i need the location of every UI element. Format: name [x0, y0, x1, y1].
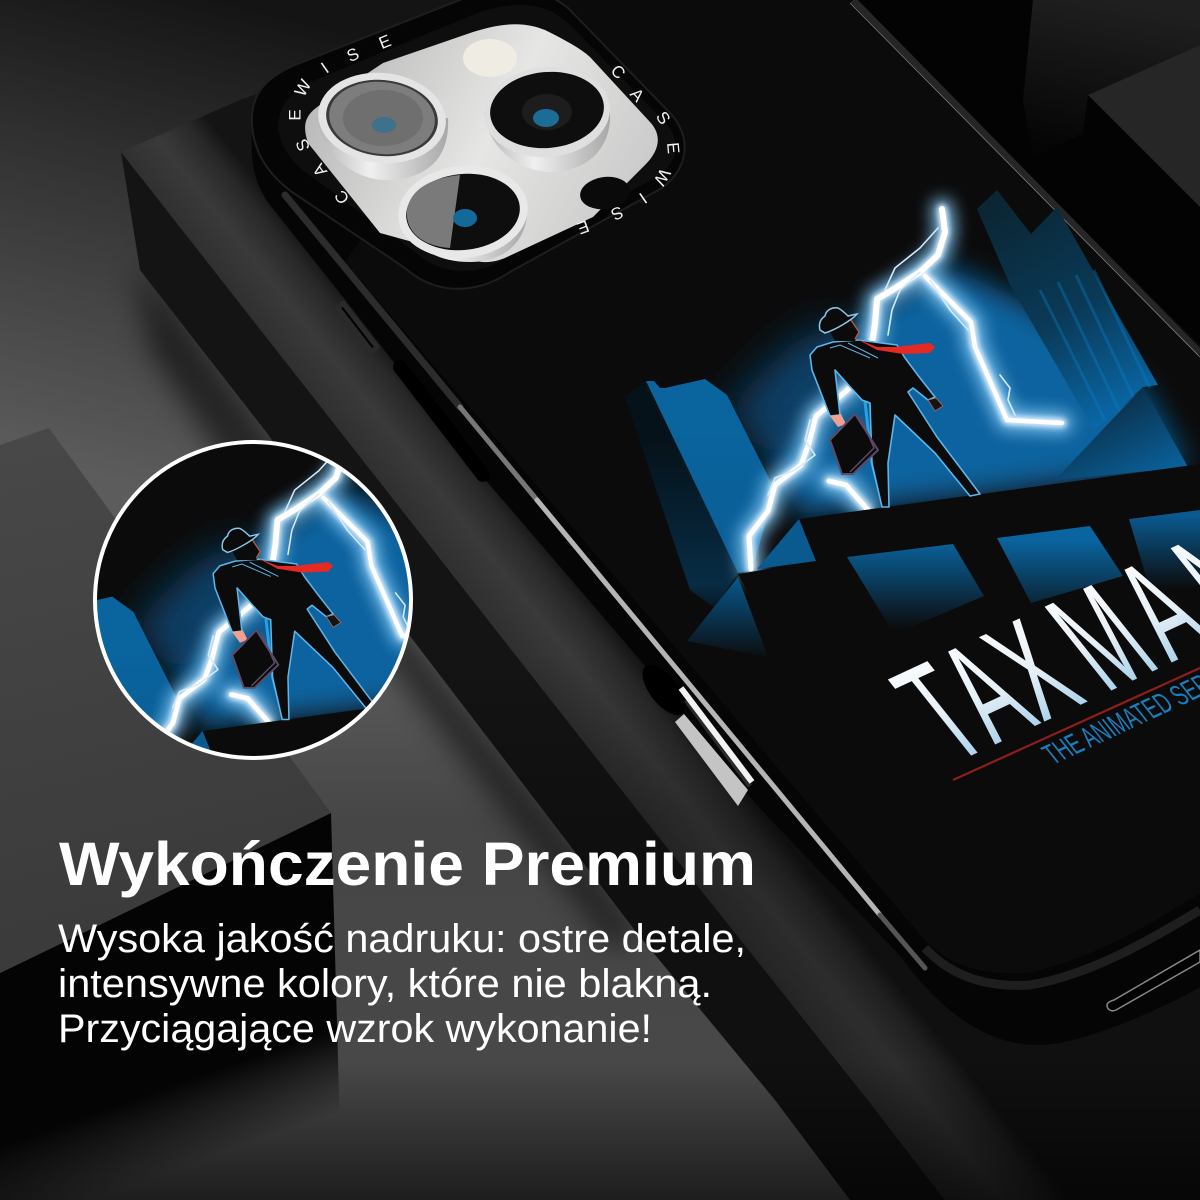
bottom rim: [925, 910, 1200, 985]
lens tele: [394, 159, 532, 265]
plinth side face: [121, 152, 945, 1200]
screen: [345, 0, 1200, 973]
logo underline: [953, 668, 1200, 780]
camera glass: [305, 24, 658, 262]
detail inset circle: [93, 440, 413, 760]
volume button: [400, 367, 483, 475]
top edge highlight: [853, 0, 1200, 353]
flash: [463, 39, 517, 77]
CASEWISE ring text: S: [292, 136, 314, 154]
artwork: taxman poster on phone: [625, 190, 1200, 770]
heading: Wykończenie Premium: [59, 830, 756, 898]
CASEWISE ring text: A: [309, 159, 331, 180]
small plinth top face: [0, 428, 331, 973]
CASEWISE ring text: A: [626, 84, 648, 106]
CASEWISE ring text: S: [652, 108, 674, 128]
body text: Wysoka jakość nadruku: ostre detale,: [58, 917, 746, 961]
camera bump outer: [252, 0, 685, 289]
silver button: [634, 658, 752, 806]
CASEWISE ring text: I: [318, 59, 332, 77]
far blocks: [853, 0, 1200, 353]
small plinth front face: [0, 813, 340, 1200]
CASEWISE ring text: E: [663, 142, 683, 154]
CASEWISE ring text: E: [376, 31, 394, 53]
soft shadow beside plinth: [135, 262, 637, 950]
CASEWISE ring text: W: [291, 76, 315, 100]
CASEWISE ring text: E: [286, 109, 304, 121]
body text: intensywne kolory, które nie blakną.: [58, 962, 712, 1006]
camera island: [252, 0, 685, 289]
side button upper: [338, 303, 377, 352]
CASEWISE ring text: S: [344, 44, 362, 66]
CASEWISE ring text: W: [650, 165, 674, 189]
CASEWISE ring text: C: [607, 61, 629, 83]
phone: [252, 0, 1200, 1045]
black ring: [278, 5, 676, 271]
CASEWISE ring text: C: [331, 186, 353, 208]
body text: [58, 917, 746, 1051]
glass highlight: [285, 195, 925, 968]
lower shading: [0, 650, 1200, 1200]
lens wide: [314, 67, 450, 180]
body text: Przyciągające wzrok wykonanie!: [58, 1007, 652, 1051]
CASEWISE ring text: S: [608, 202, 626, 224]
port: [1107, 950, 1200, 1011]
CASEWISE ring text: [286, 31, 683, 238]
lens main: [480, 62, 614, 172]
phone body: [252, 0, 1200, 1045]
CASEWISE ring text: I: [636, 189, 650, 207]
CASEWISE ring text: E: [574, 216, 592, 238]
microphone hole: [578, 174, 632, 212]
